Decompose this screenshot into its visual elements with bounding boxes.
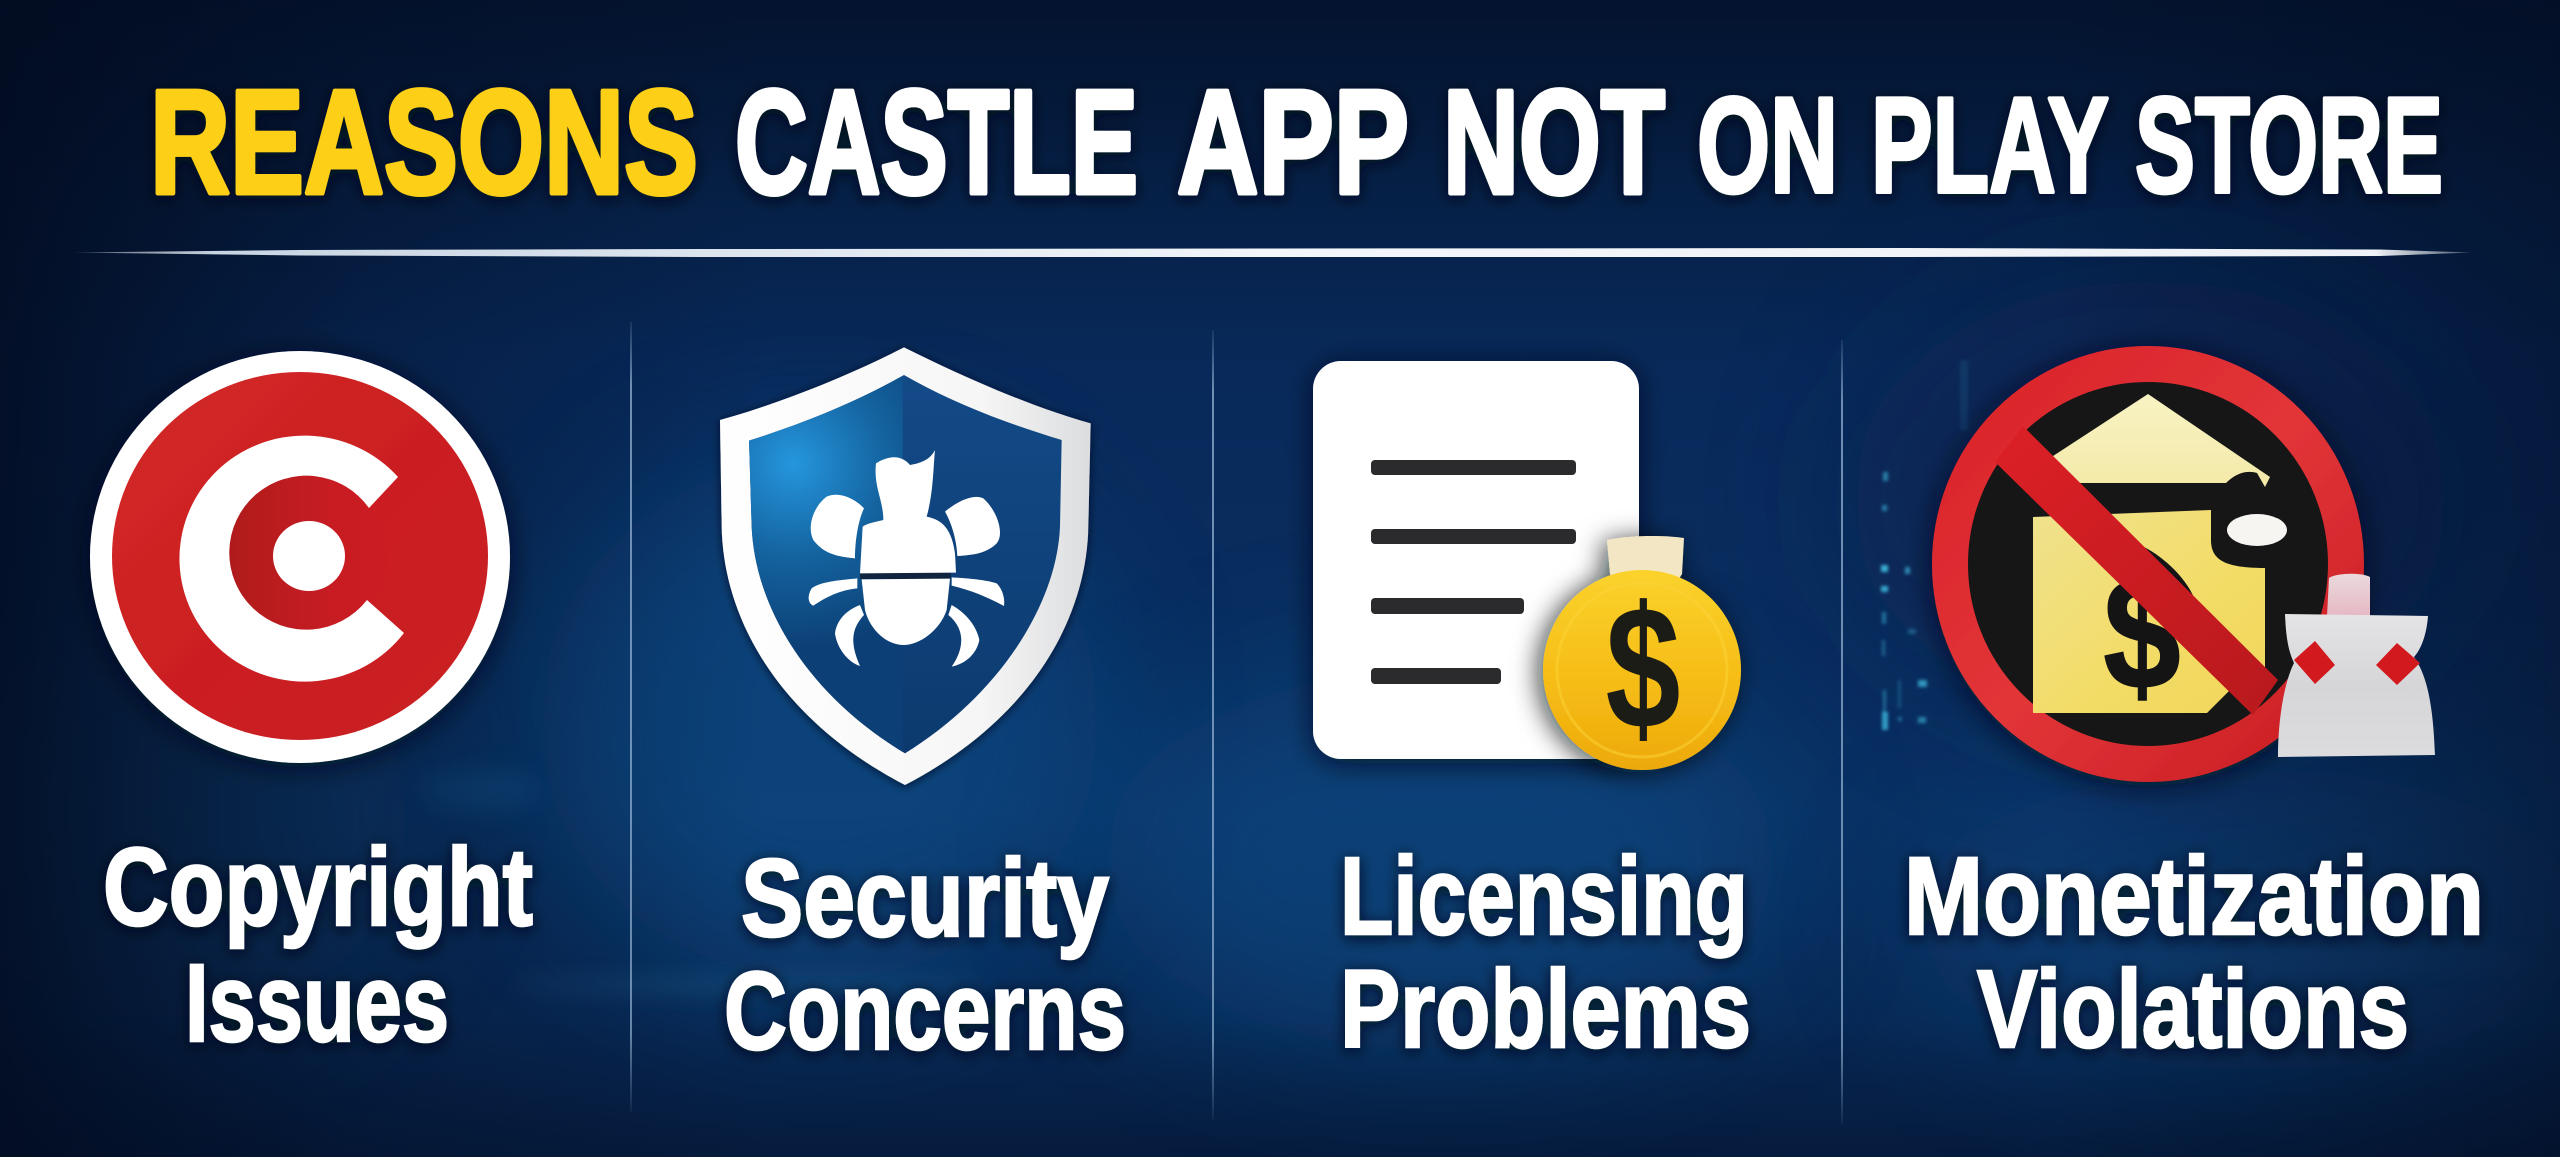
outer white disc (90, 351, 510, 763)
money bag (1543, 536, 1741, 770)
icon: licence document with money bag (1313, 361, 1741, 770)
document (1313, 361, 1639, 759)
dollar blot (2135, 547, 2195, 640)
label: Copyright Issues (103, 826, 533, 1065)
label: Monetization Violations (1904, 835, 2484, 1071)
label line: Issues (185, 942, 449, 1065)
red disc (112, 372, 488, 740)
prohibition ring (1950, 364, 2346, 764)
label line: Copyright (103, 826, 533, 949)
label line: Licensing (1340, 835, 1748, 958)
prohibition slash (1995, 426, 2278, 715)
icon: no-monetization sign with bag (1950, 364, 2435, 764)
white blob (2227, 514, 2287, 546)
title (150, 60, 2443, 225)
title word: PLAY: PLAY (1871, 69, 2109, 221)
label line: Monetization (1904, 835, 2484, 958)
bag red diamonds (2294, 641, 2420, 685)
dollar sign: $ (2104, 544, 2180, 722)
title word: APP: APP (1177, 60, 1409, 225)
centre dot (273, 521, 345, 591)
document text lines (1371, 460, 1576, 684)
icon: copyright symbol (90, 351, 510, 763)
title word: NOT: NOT (1443, 60, 1665, 225)
shield rim (720, 347, 1091, 785)
label line: Security (741, 837, 1109, 960)
shield light half (749, 376, 903, 752)
letter C (179, 436, 404, 682)
envelope flap (2050, 394, 2270, 487)
shield face (749, 375, 1062, 753)
label line: Concerns (724, 950, 1126, 1073)
label: Licensing Problems (1340, 835, 1751, 1071)
money note (2033, 510, 2265, 713)
dollar sign: $ (1606, 571, 1680, 766)
label line: Violations (1977, 948, 2409, 1071)
bug (809, 450, 1004, 667)
label: Security Concerns (724, 837, 1126, 1073)
title word: ON: ON (1697, 69, 1838, 221)
bag body (2278, 614, 2435, 757)
bag neck (2327, 574, 2370, 616)
title word: REASONS: REASONS (150, 60, 698, 225)
title divider rule (73, 248, 2471, 257)
title word: CASTLE: CASTLE (735, 60, 1138, 225)
column dividers (630, 322, 1843, 1125)
icon: security shield with bug (720, 347, 1091, 785)
label line: Problems (1340, 948, 1751, 1071)
